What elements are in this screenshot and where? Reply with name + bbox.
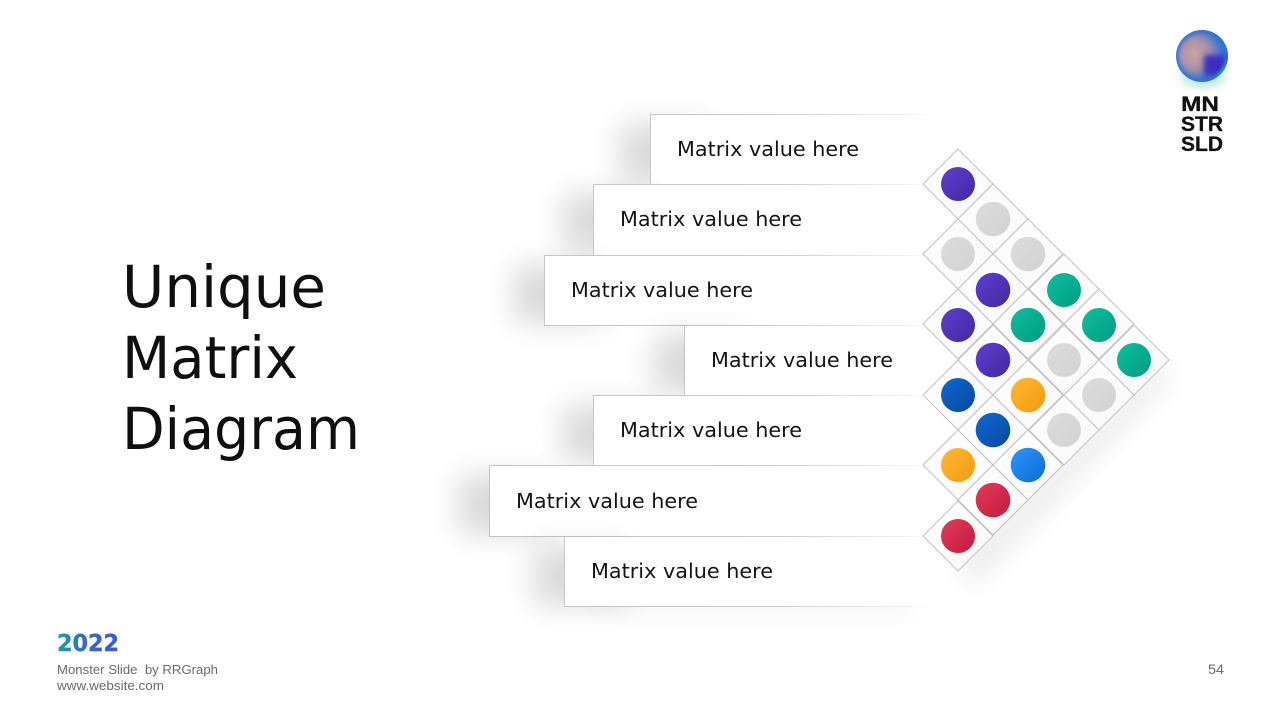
title: Diagram: [122, 395, 360, 463]
matrix row labels: [459, 114, 935, 612]
label card 2: [563, 184, 935, 255]
logo text: [1181, 93, 1223, 156]
title: Matrix: [122, 324, 298, 392]
logo: [1176, 30, 1232, 156]
footer credits: www.website.com: [56, 678, 164, 693]
logo text: SLD: [1181, 133, 1223, 156]
matrix cells: [923, 149, 1169, 571]
label card 6: [459, 465, 935, 536]
label card 4: [654, 326, 935, 396]
label card 5: [563, 395, 935, 465]
footer credits: Monster Slide by RRGraph: [57, 662, 218, 677]
label card 7: Matrix value here: [591, 559, 773, 583]
icon: logo sphere: [1176, 30, 1232, 87]
label card 7: [534, 537, 935, 612]
matrix shadow: [958, 362, 1172, 584]
logo text: MN: [1181, 93, 1219, 116]
label card 3: [514, 255, 935, 326]
title: [122, 253, 360, 463]
label card 4: Matrix value here: [711, 348, 893, 372]
logo text: STR: [1181, 113, 1223, 136]
arrow-shaped dot matrix: [923, 149, 1172, 584]
label card 1: [620, 114, 935, 184]
label card 6: Matrix value here: [516, 489, 698, 513]
title: Unique: [122, 253, 326, 321]
label card 5: Matrix value here: [620, 418, 802, 442]
label card 1: Matrix value here: [677, 137, 859, 161]
page number: 54: [1208, 661, 1224, 677]
matrix dots: [941, 167, 1151, 553]
footer credits: [56, 662, 218, 693]
label card 2: Matrix value here: [620, 207, 802, 231]
label card 3: Matrix value here: [571, 278, 753, 302]
footer year: 2022: [57, 631, 119, 657]
